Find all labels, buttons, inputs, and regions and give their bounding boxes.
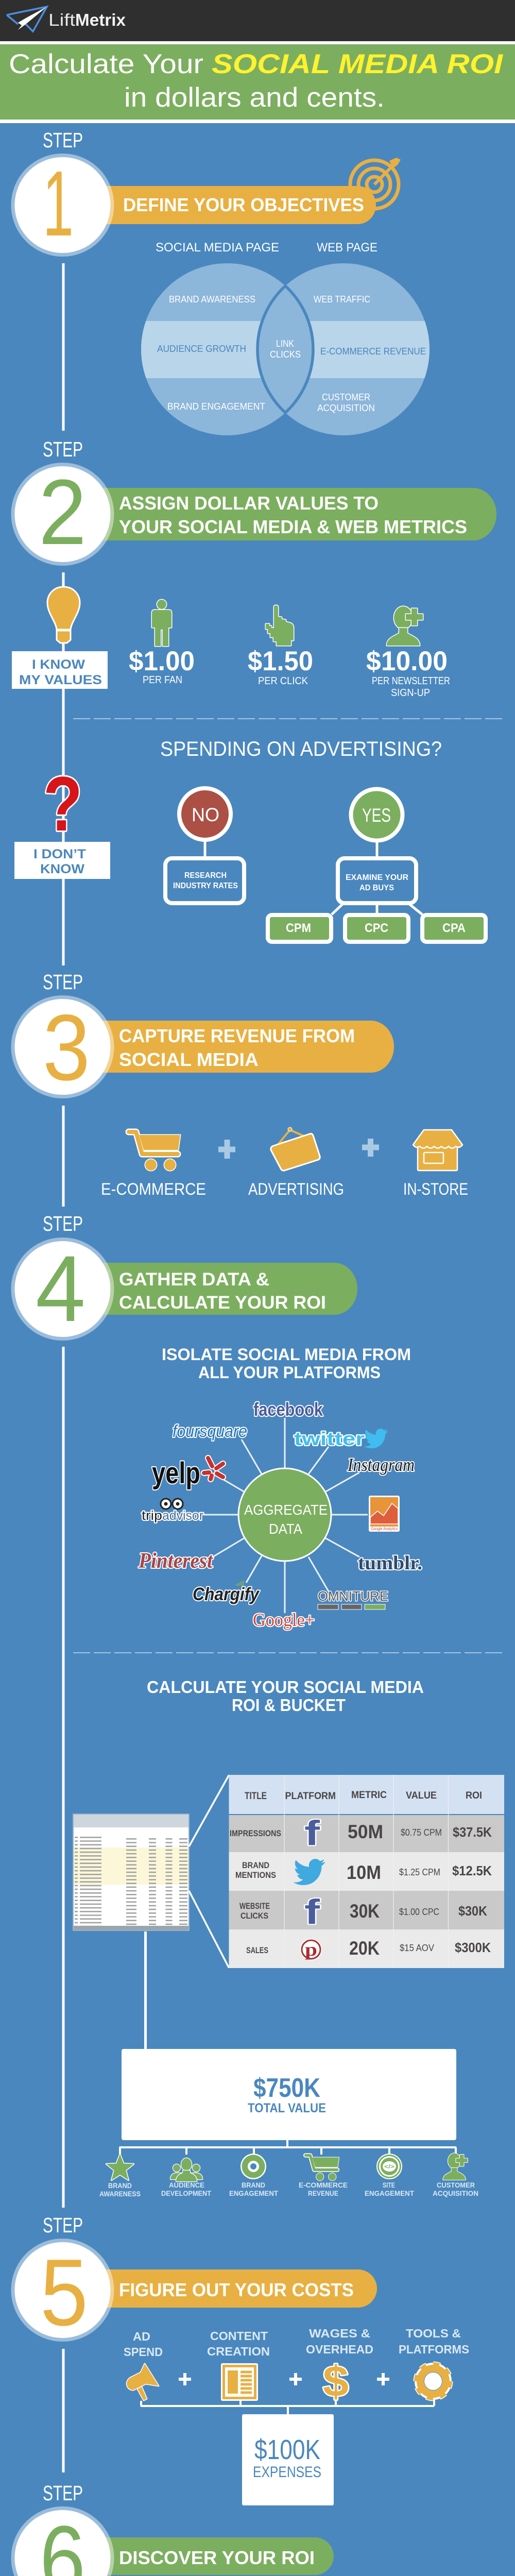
bucket: site engagement: </> xyxy=(384,2164,394,2170)
heading: isolate social media: ALL YOUR PLATFORMS xyxy=(198,1363,381,1382)
label: I know my values xyxy=(12,651,108,689)
flow: no branch: RESEARCH xyxy=(184,871,227,880)
bucket: e-commerce revenue xyxy=(299,2156,348,2197)
logo: google analytics: Google Analytics xyxy=(371,1527,398,1531)
logo: twitter: twitter xyxy=(294,1428,365,1449)
step 5: STEP xyxy=(43,2213,83,2237)
value: per click: PER CLICK xyxy=(258,675,308,687)
table header xyxy=(245,1790,482,1802)
icon: cart xyxy=(129,1132,180,1171)
logo: tripadvisor xyxy=(142,1499,203,1523)
logo: foursquare: foursquare xyxy=(173,1421,247,1440)
value: per newsletter sign-up: PER NEWSLETTER xyxy=(372,675,450,687)
heading bar: discover ROI: DISCOVER YOUR ROI xyxy=(119,2547,315,2568)
value: per click: $1.50 xyxy=(248,646,313,676)
step 3: STEP xyxy=(43,970,83,994)
flow: yes branch: AD BUYS xyxy=(359,884,394,892)
flow: no branch xyxy=(165,788,244,903)
bucket: site engagement: SITE xyxy=(383,2181,395,2189)
expenses box xyxy=(242,2414,334,2505)
heading bar: define your objectives: DEFINE YOUR OBJECTIVES xyxy=(123,194,364,215)
venn diagram: CLICKS xyxy=(270,349,301,360)
bucket: customer acquisition: ACQUISITION xyxy=(433,2189,478,2197)
logo: tumblr: tumblr. xyxy=(358,1552,422,1574)
row: impressions xyxy=(230,1814,492,1853)
plus sign xyxy=(179,2373,191,2385)
revenue sources: ADVERTISING xyxy=(248,1180,344,1198)
cost categories: PLATFORMS xyxy=(399,2343,469,2356)
cost categories: TOOLS & xyxy=(406,2327,461,2340)
venn diagram xyxy=(141,241,430,435)
row: website clicks: 30K xyxy=(350,1901,380,1922)
logo wordmark: Lift xyxy=(48,10,75,29)
row: sales: $15 AOV xyxy=(400,1943,434,1953)
bucket: e-commerce revenue: E-COMMERCE xyxy=(299,2181,348,2189)
table header: ROI xyxy=(466,1790,482,1801)
heading bar: figure out costs xyxy=(93,2269,377,2308)
venn diagram: LINK xyxy=(276,338,294,349)
value: per fan: $1.00 xyxy=(129,646,195,676)
flow: no branch: INDUSTRY RATES xyxy=(173,882,238,890)
expenses box: $100K xyxy=(254,2434,320,2465)
aggregate data hub diagram xyxy=(138,1399,422,1630)
row: brand mentions: $1.25 CPM xyxy=(399,1867,440,1877)
heading bar: capture revenue: SOCIAL MEDIA xyxy=(119,1049,259,1070)
venn diagram: E-COMMERCE REVENUE xyxy=(320,346,426,357)
logo: tripadvisor: advisor xyxy=(162,1509,203,1523)
table header: TITLE xyxy=(245,1791,267,1802)
icon: pinterest: p xyxy=(305,1939,317,1960)
logo: facebook: facebook xyxy=(253,1399,323,1420)
logo: pinterest: Pinterest xyxy=(138,1549,213,1573)
cost categories xyxy=(124,2327,469,2415)
flow: yes branch xyxy=(268,789,486,942)
total value box: $750K xyxy=(253,2073,320,2103)
step 1 xyxy=(11,128,401,257)
row: brand mentions: 10M xyxy=(347,1862,381,1883)
box: CPC xyxy=(345,915,408,942)
plus sign xyxy=(289,2373,302,2385)
bucket: audience development xyxy=(161,2158,211,2197)
number badge 5: 5 xyxy=(40,2239,88,2345)
step 3 xyxy=(11,970,394,1100)
bucket: customer acquisition: CUSTOMER xyxy=(437,2181,475,2189)
bucket: site engagement xyxy=(365,2154,414,2197)
value: per fan xyxy=(129,600,195,686)
row: sales: $300K xyxy=(455,1940,491,1955)
number badge 2: 2 xyxy=(39,461,87,564)
icon: star xyxy=(106,2154,134,2180)
revenue sources: IN-STORE xyxy=(403,1180,468,1198)
step 4 xyxy=(11,1212,357,1341)
logo: chargify: Chargify xyxy=(193,1584,260,1604)
plus sign xyxy=(362,1139,379,1157)
header bar with logo xyxy=(0,0,515,41)
value: per fan: PER FAN xyxy=(143,674,182,686)
icon: document xyxy=(221,2363,258,2401)
step 5 xyxy=(11,2213,377,2345)
logo: yelp: yelp xyxy=(152,1456,200,1490)
connector to total value xyxy=(144,1931,147,2050)
box: CPA xyxy=(422,915,486,942)
spreadsheet thumbnail xyxy=(73,1814,189,1930)
row: sales: SALES xyxy=(246,1945,268,1955)
icon: people xyxy=(170,2158,202,2181)
box: CPA: CPA xyxy=(442,921,466,935)
heading bar: figure out costs: FIGURE OUT YOUR COSTS xyxy=(119,2279,354,2300)
icon: question mark: ? xyxy=(43,760,82,847)
flow: yes branch: EXAMINE YOUR xyxy=(346,873,408,882)
step 2 xyxy=(11,437,496,566)
label: I know my values: MY VALUES xyxy=(19,673,102,687)
row: sales xyxy=(246,1938,491,1960)
box: CPM: CPM xyxy=(286,921,311,935)
zoom lines from spreadsheet xyxy=(189,1775,229,1968)
bucket: customer acquisition xyxy=(433,2153,478,2197)
plus sign xyxy=(218,1140,235,1159)
row: website clicks: $30K xyxy=(458,1903,487,1919)
icon: gear xyxy=(416,2364,450,2398)
title banner: SOCIAL MEDIA ROI xyxy=(212,49,503,79)
heading: isolate social media: ISOLATE SOCIAL MEDIA FROM xyxy=(162,1345,411,1364)
bucket connector xyxy=(119,2140,456,2155)
title banner xyxy=(0,44,515,120)
venn diagram: WEB PAGE xyxy=(317,241,377,255)
step 1: STEP xyxy=(43,128,83,152)
cost categories: SPEND xyxy=(124,2345,163,2359)
heading: calculate social media ROI: ROI & BUCKET xyxy=(232,1696,346,1715)
logo wordmark xyxy=(48,10,126,29)
flow: no branch: NO xyxy=(192,804,219,825)
bucket: audience development: DEVELOPMENT xyxy=(161,2189,211,2197)
row: impressions: 50M xyxy=(348,1821,383,1842)
row: website clicks: $1.00 CPC xyxy=(399,1907,439,1917)
step 6: STEP xyxy=(43,2481,83,2505)
row: impressions: $0.75 CPM xyxy=(401,1827,442,1838)
row: website clicks: CLICKS xyxy=(241,1911,268,1921)
heading bar: assign dollar values: ASSIGN DOLLAR VALUES TO xyxy=(119,493,379,514)
icon: twitter bird xyxy=(294,1859,325,1885)
icon: megaphone xyxy=(127,2364,159,2400)
icon: user add xyxy=(443,2153,468,2180)
heading bar: gather data: GATHER DATA & xyxy=(119,1269,269,1290)
flow: yes branch: YES xyxy=(362,805,391,826)
number badge 1 xyxy=(11,152,114,257)
label: I don't know: KNOW xyxy=(40,862,84,876)
icon: person xyxy=(152,600,171,646)
venn diagram: ACQUISITION xyxy=(317,403,375,413)
icon: pointer hand xyxy=(266,605,294,646)
bucket: brand awareness xyxy=(99,2154,141,2198)
icon: light bulb xyxy=(47,587,80,643)
bucket: brand awareness: BRAND xyxy=(108,2181,132,2190)
bucket: audience development: AUDIENCE xyxy=(169,2181,204,2189)
box: CPM xyxy=(268,915,331,942)
aggregate data hub diagram: DATA xyxy=(269,1521,302,1537)
logo: instagram: Instagram xyxy=(347,1454,415,1475)
ROI table xyxy=(229,1775,504,1968)
heading bar: assign dollar values xyxy=(93,488,496,540)
label: I know my values: I KNOW xyxy=(32,657,85,672)
number badge 4: 4 xyxy=(36,1236,85,1341)
icon: ring xyxy=(241,2154,266,2179)
heading bar: discover ROI xyxy=(93,2537,334,2575)
total value box xyxy=(122,2049,456,2140)
icon: hanging sign xyxy=(271,1127,320,1171)
heading: spending on advertising: SPENDING ON ADVERTISING? xyxy=(160,738,442,760)
icon: site xyxy=(376,2154,402,2179)
number badge 5 xyxy=(11,2239,114,2345)
bucket: e-commerce revenue: REVENUE xyxy=(308,2189,338,2197)
venn diagram: WEB TRAFFIC xyxy=(314,294,370,304)
revenue sources xyxy=(101,1127,468,1198)
heading: isolate social media xyxy=(162,1345,411,1382)
logo wordmark: Metrix xyxy=(75,10,126,29)
title banner: Calculate Your xyxy=(9,49,203,79)
number badge 2 xyxy=(11,461,114,566)
row: sales: 20K xyxy=(349,1938,380,1959)
logo: omniture: OMNITURE xyxy=(318,1588,388,1604)
row: website clicks: WEBSITE xyxy=(239,1901,270,1911)
value: per newsletter sign-up: SIGN-UP xyxy=(391,687,430,699)
number badge 1: 1 xyxy=(43,152,74,256)
icon: cart xyxy=(305,2156,339,2180)
logo: google analytics xyxy=(369,1496,400,1532)
icon: target xyxy=(350,158,401,209)
icon: dollar: $ xyxy=(323,2357,349,2405)
value: per click xyxy=(248,605,313,687)
logo: google plus: Google+ xyxy=(253,1609,315,1630)
icon: facebook: f xyxy=(304,1892,320,1931)
bucket: brand awareness: AWARENESS xyxy=(99,2190,141,2198)
number badge 6 xyxy=(11,2506,114,2576)
bucket: site engagement: ENGAGEMENT xyxy=(365,2189,414,2197)
icon: facebook: f xyxy=(304,1814,320,1853)
box: CPC: CPC xyxy=(365,921,388,935)
table header: PLATFORM xyxy=(285,1791,336,1802)
row: brand mentions: $12.5K xyxy=(452,1863,492,1878)
step 6 xyxy=(11,2481,334,2576)
row: impressions: $37.5K xyxy=(453,1824,492,1840)
heading bar: capture revenue: CAPTURE REVENUE FROM xyxy=(119,1025,355,1046)
venn diagram: SOCIAL MEDIA PAGE xyxy=(156,241,279,255)
value: per newsletter sign-up: $10.00 xyxy=(366,646,448,676)
cost categories: CONTENT xyxy=(210,2329,268,2343)
plus sign xyxy=(377,2373,389,2385)
timeline lines xyxy=(62,263,65,2576)
label: I don't know: I DON’T xyxy=(33,847,86,861)
venn diagram: BRAND AWARENESS xyxy=(169,294,255,304)
row: impressions: IMPRESSIONS xyxy=(230,1828,281,1838)
row: brand mentions xyxy=(235,1859,492,1885)
heading bar: define your objectives xyxy=(93,186,376,224)
heading bar: gather data xyxy=(93,1263,357,1315)
number badge 4 xyxy=(11,1236,114,1341)
row: brand mentions: BRAND xyxy=(242,1860,269,1870)
bucket: brand engagement xyxy=(229,2154,278,2197)
row: brand mentions: MENTIONS xyxy=(235,1870,276,1880)
logo icon xyxy=(7,7,47,31)
number badge 3 xyxy=(11,995,114,1100)
venn diagram: CUSTOMER xyxy=(322,392,370,402)
icon: user add xyxy=(387,606,423,646)
cost categories: AD xyxy=(133,2330,150,2343)
table header: VALUE xyxy=(406,1790,437,1801)
venn diagram: AUDIENCE GROWTH xyxy=(157,344,246,354)
heading bar: capture revenue xyxy=(93,1021,394,1073)
icon: pinterest xyxy=(300,1939,322,1960)
cost categories: CREATION xyxy=(207,2345,270,2358)
aggregate data hub diagram: AGGREGATE xyxy=(244,1502,328,1518)
cost categories: WAGES & xyxy=(309,2327,370,2340)
label: I don't know xyxy=(14,842,110,879)
revenue sources: E-COMMERCE xyxy=(101,1180,206,1198)
value: per newsletter sign-up xyxy=(366,606,450,699)
step 4: STEP xyxy=(43,1212,83,1235)
logo: tripadvisor: trip xyxy=(142,1509,162,1523)
venn diagram: BRAND ENGAGEMENT xyxy=(167,401,265,412)
heading bar: gather data: CALCULATE YOUR ROI xyxy=(119,1293,326,1313)
bucket: brand engagement: ENGAGEMENT xyxy=(229,2189,278,2197)
heading: calculate social media ROI: CALCULATE YOUR SOCIAL MEDIA xyxy=(147,1677,424,1697)
step 2: STEP xyxy=(43,437,83,461)
number badge 3: 3 xyxy=(43,995,90,1100)
bucket: brand engagement: BRAND xyxy=(242,2181,265,2189)
logo: twitter xyxy=(294,1428,388,1449)
icon: store xyxy=(413,1130,462,1171)
table header: METRIC xyxy=(351,1790,387,1801)
total value box: TOTAL VALUE xyxy=(248,2101,326,2115)
title banner: in dollars and cents. xyxy=(124,82,385,113)
heading: calculate social media ROI xyxy=(147,1677,424,1715)
row: website clicks xyxy=(239,1892,487,1931)
expenses box: EXPENSES xyxy=(253,2464,321,2481)
cost categories: OVERHEAD xyxy=(306,2343,373,2356)
heading bar: assign dollar values: YOUR SOCIAL MEDIA & WEB METRICS xyxy=(119,516,467,537)
